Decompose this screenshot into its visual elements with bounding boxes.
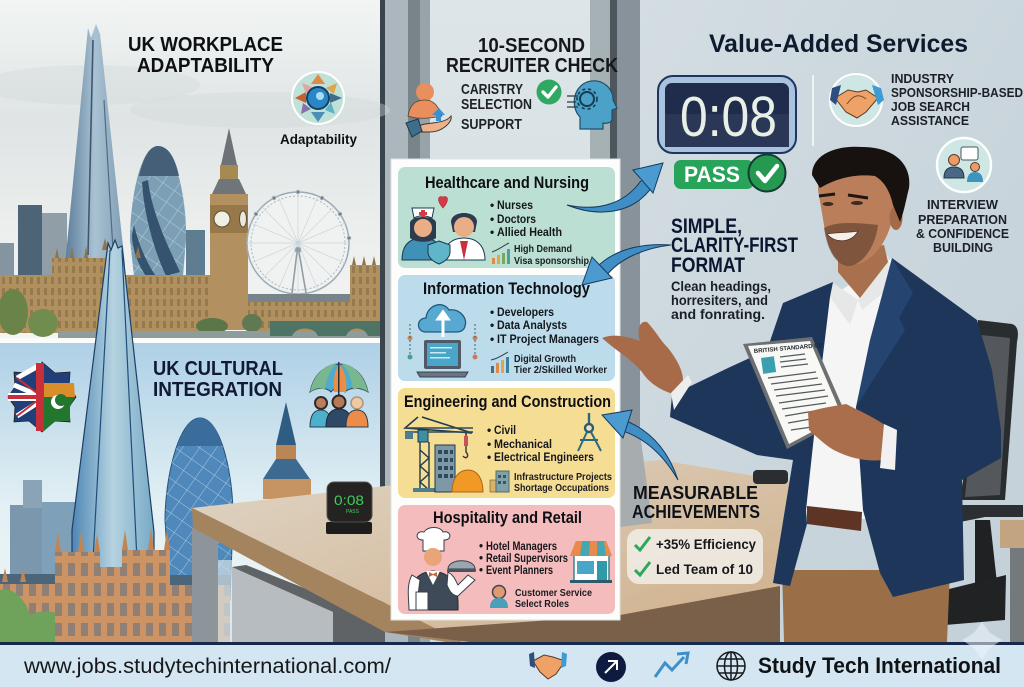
- list: healthcare roles: Allied Health: [497, 225, 562, 239]
- note: customer service: Customer Service: [515, 587, 592, 599]
- text: simple clarity-first format: FORMAT: [671, 254, 745, 277]
- list: recruiter check words: CARISTRY: [461, 81, 523, 98]
- panel: white divider between left panels: [0, 338, 380, 343]
- text: interview preparation: [916, 197, 1009, 255]
- card: hospitality and retail: [398, 505, 615, 614]
- device: small desk clock: 0:08: [334, 492, 364, 508]
- text: measurable achievements: ACHIEVEMENTS: [632, 501, 760, 522]
- furniture: desk: [192, 460, 1024, 648]
- heading: 10-second recruiter check: [446, 35, 618, 77]
- note: infrastructure and shortage: Shortage Occupations: [514, 482, 609, 494]
- list: hospitality roles: •: [479, 565, 483, 577]
- list: IT roles: •: [490, 332, 494, 346]
- building: Houses of Parliament: [0, 238, 380, 333]
- timer display: 0:08: [680, 85, 777, 149]
- list: engineering roles: Mechanical: [494, 437, 552, 451]
- list: IT roles: •: [490, 318, 494, 332]
- panel: achievements list: Led Team of 10: [656, 561, 753, 577]
- heading: UK workplace adaptability: [128, 34, 283, 77]
- footer icon: arrow button: [596, 652, 626, 682]
- face: [818, 155, 895, 265]
- icon: growth chart: [492, 243, 510, 264]
- card: engineering and construction: Engineering and Construction: [404, 393, 611, 411]
- jacket lapel: [856, 258, 913, 407]
- timer display: [658, 76, 796, 153]
- list: engineering roles: •: [487, 437, 491, 451]
- footer icon: handshake: [529, 652, 567, 679]
- device: small desk clock: PASS: [346, 509, 360, 515]
- text: measurable achievements: MEASURABLE: [633, 482, 758, 503]
- card: information technology: [398, 275, 615, 381]
- note: demand and visa: High Demand: [514, 243, 572, 255]
- icon: UK and Pakistan combined flag badge: [8, 362, 76, 432]
- decorative watermark sparkle: [962, 622, 1002, 660]
- card: hospitality and retail: Hospitality and Retail: [433, 509, 582, 527]
- list: recruiter check words: [461, 81, 532, 133]
- text: simple clarity-first format: and fonrating.: [671, 307, 765, 322]
- eyes, brows and mouth: [819, 194, 868, 198]
- list: IT roles: Data Analysts: [497, 318, 567, 332]
- card: healthcare and nursing: Healthcare and Nursing: [425, 174, 589, 192]
- list: recruiter check words: SUPPORT: [461, 116, 522, 133]
- illustration: trees: [0, 589, 92, 642]
- list: hospitality roles: Retail Supervisors: [486, 553, 568, 565]
- heading: 10-second recruiter check: RECRUITER CHECK: [446, 55, 618, 77]
- card: healthcare and nursing: [398, 167, 615, 268]
- shirt collar: [830, 255, 893, 325]
- arrow: sector panel to timer: [567, 163, 663, 212]
- list: IT roles: IT Project Managers: [497, 332, 599, 346]
- icon: handshake badge: [830, 74, 884, 126]
- trousers: [782, 570, 950, 642]
- heading: value-added services: Value-Added Services: [709, 30, 968, 58]
- panel: achievements list: +35% Efficiency: [656, 536, 756, 552]
- text: interview preparation: BUILDING: [933, 240, 993, 255]
- list: IT roles: •: [490, 305, 494, 319]
- note: demand and visa: Visa sponsorship: [514, 255, 589, 267]
- device: laptop on desk: [620, 433, 652, 527]
- badge: pass: [674, 154, 786, 192]
- hair: [812, 147, 909, 222]
- London Eye: [247, 190, 351, 294]
- panel: office wall background: [640, 0, 1024, 642]
- tablet with CV: [743, 337, 847, 449]
- tablet with CV: BRITISH STANDARD CV: [754, 343, 823, 355]
- illustration: Parliament building: [0, 568, 230, 642]
- text: job search assistance: INDUSTRY: [891, 71, 954, 86]
- building: the Gherkin: [130, 146, 186, 276]
- badge: pass: PASS: [684, 162, 740, 187]
- heading: UK cultural integration: [153, 358, 283, 401]
- neck: [838, 245, 888, 298]
- list: engineering roles: Civil: [494, 423, 516, 437]
- list: healthcare roles: •: [490, 212, 494, 226]
- text: interview preparation: INTERVIEW: [927, 197, 999, 212]
- illustration: gherkin: [165, 418, 233, 600]
- panel: job sector cards: [391, 159, 620, 620]
- icon: drafting compass: [578, 413, 601, 451]
- icon: interview people: [937, 138, 991, 192]
- shirt: [806, 258, 905, 520]
- list: healthcare roles: Doctors: [497, 212, 536, 226]
- note: infrastructure and shortage: Infrastructure Projects: [514, 471, 612, 483]
- icon: city buildings: [490, 471, 509, 492]
- list: recruiter check words: SELECTION: [461, 96, 532, 113]
- card: information technology: Information Technology: [423, 280, 591, 298]
- note: customer service: [515, 587, 592, 610]
- note: demand and visa: [514, 243, 589, 267]
- list: hospitality roles: •: [479, 541, 483, 553]
- icon: green check: [536, 80, 562, 104]
- text: simple clarity-first format: SIMPLE,: [671, 215, 742, 238]
- list: engineering roles: •: [487, 450, 491, 464]
- list: engineering roles: Electrical Engineers: [494, 450, 594, 464]
- list: healthcare roles: [490, 198, 562, 239]
- heading: UK workplace adaptability: ADAPTABILITY: [137, 55, 275, 77]
- icon: growth chart: [491, 352, 509, 373]
- list: engineering roles: •: [487, 423, 491, 437]
- right shirt cuff: [880, 424, 897, 470]
- text: simple clarity-first format: horresiters, and: [671, 293, 768, 308]
- list: IT roles: Developers: [497, 305, 554, 319]
- icon: shop front: [570, 541, 612, 583]
- building: Big Ben tower: [210, 128, 248, 330]
- text: simple clarity-first format: CLARITY-FIRST: [671, 234, 798, 257]
- divider: [812, 75, 814, 146]
- icon: adaptability compass with arrows: [292, 72, 344, 124]
- shirt cuff: [671, 375, 692, 410]
- list: healthcare roles: •: [490, 225, 494, 239]
- heading: 10-second recruiter check: 10-SECOND: [478, 35, 585, 57]
- icon: cloud upload and laptop: [408, 305, 478, 377]
- text: simple clarity-first format: [671, 215, 798, 322]
- panel: UK workplace adaptability skyline photo: [0, 0, 390, 338]
- panel: UK cultural integration illustration: [0, 343, 380, 642]
- footer icon: trend arrow: [655, 653, 688, 677]
- jacket right panel and arm: [856, 258, 1001, 597]
- list: healthcare roles: Nurses: [497, 198, 533, 212]
- footer website: www.jobs.studytechinternational.com/: [23, 655, 391, 678]
- icon: hand supporting person: [406, 83, 451, 137]
- label: adaptability: Adaptability: [280, 131, 357, 147]
- footer brand: Study Tech International: [758, 653, 1001, 678]
- arrow: achievements to engineering card: [602, 410, 678, 480]
- footer bar: [0, 642, 1024, 687]
- arrow: format to IT card: [582, 245, 671, 285]
- icon: nurse and doctor: [402, 197, 485, 264]
- right hand: [808, 404, 892, 461]
- trees and river bridge: [0, 289, 380, 338]
- text: job search assistance: JOB SEARCH: [891, 99, 970, 114]
- note: infrastructure and shortage: [514, 471, 612, 494]
- card: engineering and construction: [398, 388, 615, 498]
- list: hospitality roles: •: [479, 553, 483, 565]
- note: digital growth and visa tier: Digital Growth: [514, 353, 576, 365]
- icon: chef waiter with cloche: [408, 528, 476, 610]
- illustration: foreground Shard crossing both panels: [55, 240, 170, 642]
- furniture: office chair: [753, 320, 1023, 625]
- ear: [890, 206, 902, 230]
- panel: achievements list: [627, 529, 763, 584]
- heading: UK cultural integration: UK CULTURAL: [153, 358, 283, 380]
- heading: UK workplace adaptability: UK WORKPLACE: [128, 34, 283, 56]
- icon: head with gear: [567, 81, 617, 129]
- list: IT roles: [490, 305, 599, 346]
- text: job search assistance: ASSISTANCE: [891, 113, 969, 128]
- jacket left panel and arm: [670, 282, 833, 586]
- note: digital growth and visa tier: [514, 353, 607, 376]
- beard shading: [824, 223, 878, 266]
- note: customer service: Select Roles: [515, 598, 569, 610]
- panel: window frame centre: [380, 0, 640, 642]
- left hand: [602, 322, 683, 395]
- icon: umbrella over diverse people: [310, 362, 368, 427]
- belt: [807, 506, 862, 531]
- text: simple clarity-first format: Clean headings,: [671, 279, 771, 294]
- list: hospitality roles: Event Planners: [486, 565, 553, 577]
- heading: UK cultural integration: INTEGRATION: [153, 379, 282, 401]
- text: job search assistance: [891, 71, 1023, 128]
- device: small desk clock: [326, 482, 372, 534]
- text: measurable achievements: [632, 482, 760, 522]
- icon: customer service person: [490, 586, 508, 608]
- person: presenter with tablet: [602, 147, 1001, 642]
- footer icon: globe: [717, 652, 745, 680]
- illustration: Big Ben: [263, 402, 311, 499]
- note: digital growth and visa tier: Tier 2/Skilled Worker: [514, 364, 607, 376]
- text: interview preparation: PREPARATION: [918, 212, 1007, 227]
- list: healthcare roles: •: [490, 198, 494, 212]
- text: interview preparation: & CONFIDENCE: [916, 226, 1009, 241]
- list: hospitality roles: [479, 541, 568, 577]
- list: hospitality roles: Hotel Managers: [486, 541, 557, 553]
- building: the Shard: [65, 24, 125, 265]
- list: engineering roles: [487, 423, 594, 464]
- icon: crane, tower block and hard hat: [405, 417, 483, 492]
